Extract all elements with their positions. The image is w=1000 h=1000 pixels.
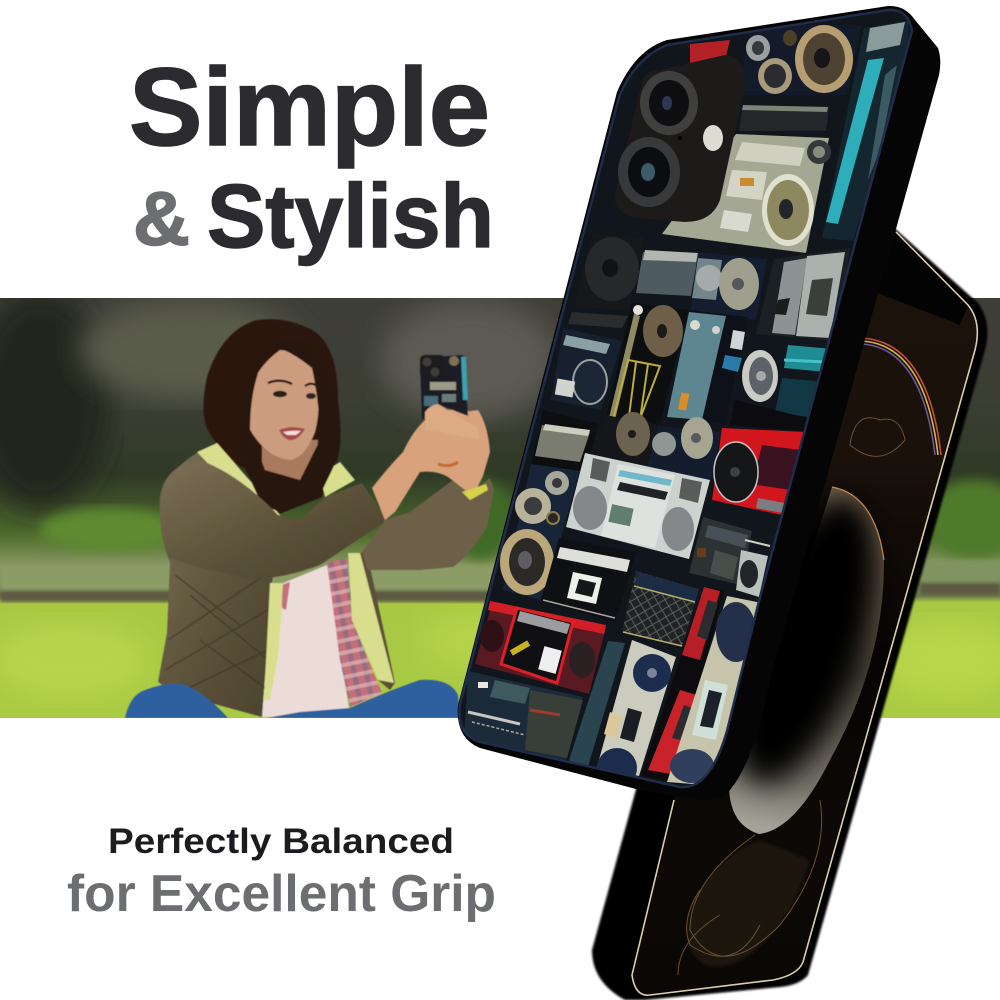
teal equalizer strip: [822, 20, 910, 241]
notch area: [870, 232, 968, 325]
dark deck: [689, 517, 752, 585]
wallpaper glints: [678, 418, 905, 975]
photo band: park background: [0, 290, 1000, 718]
heading: Simple & Stylish: Stylish: [207, 167, 494, 267]
yellow collar and lining: [197, 443, 394, 700]
large boombox: [662, 105, 831, 253]
shirt: [262, 565, 350, 717]
teal mixer block: [667, 310, 748, 424]
forearm and hands: [372, 410, 490, 520]
navy rim of case: [459, 10, 912, 787]
screen wallpaper: [632, 232, 977, 995]
heading: Simple & Stylish: &: [133, 177, 190, 262]
near sleeve: [160, 460, 387, 578]
far sleeve: [362, 478, 494, 570]
face details: [268, 381, 318, 440]
black phone case: [592, 226, 987, 1000]
heading: Simple & Stylish: Simple: [129, 46, 490, 169]
black case body: [458, 6, 940, 800]
lit wallpaper shapes: [688, 488, 884, 966]
watch band: [462, 484, 488, 500]
tagline: Perfectly Balanced for Excellent Grip: [67, 822, 496, 923]
hair back: [203, 319, 340, 515]
navy boombox left: [551, 328, 622, 410]
fingers: [424, 403, 448, 421]
top speakers: [737, 25, 862, 95]
speaker row: [592, 412, 722, 482]
teal strip: [569, 641, 625, 770]
red stripe block: [641, 587, 724, 782]
black boombox lower left: [529, 410, 598, 483]
heading: Simple & Stylish: [129, 46, 494, 267]
woman taking a selfie: [125, 319, 494, 718]
grey deck: [636, 252, 698, 296]
jeans: [125, 680, 460, 718]
face: [246, 350, 319, 460]
cream boombox: [667, 596, 762, 785]
bottom left hi-fi deck: [464, 671, 583, 760]
white boombox: [597, 640, 676, 788]
silver speaker and teal panel: [742, 345, 826, 417]
jacket body: [158, 453, 280, 717]
camera island: [615, 55, 745, 222]
red boombox lower: [475, 601, 606, 694]
hair front: [244, 350, 341, 511]
gold frame line: [632, 232, 977, 995]
printed boombox artwork: [459, 10, 912, 788]
tagline: Perfectly Balanced for Excellent Grip: for Excellent Grip: [67, 865, 496, 923]
small phone with case: [420, 355, 468, 420]
top red sliver: [690, 40, 730, 65]
silver boombox: [566, 453, 710, 559]
yellow strip block: [607, 303, 688, 424]
jacket quilting: [165, 500, 320, 688]
speaker tower: [500, 464, 580, 600]
rainbow arc: [862, 338, 941, 455]
red boombox upper: [712, 400, 815, 517]
front phone case: [458, 6, 940, 800]
amplifier with mesh: [622, 571, 699, 646]
plaid shirt: [327, 558, 382, 707]
silver tape block: [756, 248, 850, 341]
tagline: Perfectly Balanced for Excellent Grip: Perfectly Balanced: [108, 822, 454, 861]
fan and speaker block: [691, 252, 767, 320]
dark speaker block: [568, 234, 644, 328]
back phone: gold iPhone in black case: [592, 226, 987, 1000]
neck: [261, 439, 319, 481]
small silver player: [736, 540, 770, 597]
black cassette deck: [541, 538, 636, 622]
